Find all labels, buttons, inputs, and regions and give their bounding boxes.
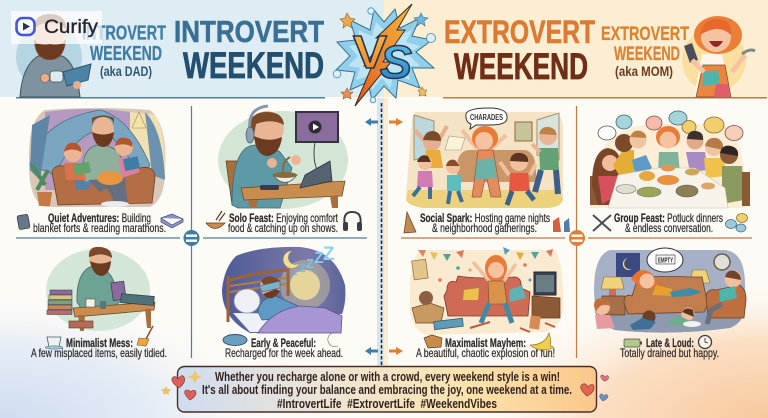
caption: group feast [593,211,748,235]
caption: quiet adventures: blanket forts & reading marathons. [33,221,166,235]
heading: introvert weekend: INTROVERT [174,14,324,49]
icon: banner hearts right [572,370,609,401]
header: introvert small title [82,22,166,79]
icon: equals orange [569,230,585,246]
caption: quiet adventures: Quiet Adventures: Building [48,211,151,225]
heading: extrovert weekend: WEEKEND [454,46,588,87]
callout: closing message banner: It's all about finding your balance and embracing the joy, one weekend at a time. [202,382,572,397]
header: extrovert small title: (aka MOM) [615,63,673,79]
caption: solo feast: Solo Feast: Enjoying comfort [229,211,338,225]
header: extrovert mom character [682,16,755,97]
caption: maximalist mayhem: A beautiful, chaotic explosion of fun! [416,346,555,360]
illustration: solo feast [218,106,348,209]
header: extrovert small title: WEEKEND [614,44,680,65]
illustration: late and loud [594,248,746,333]
VS burst badge: V [353,26,387,78]
arrow: bottom left [365,347,378,355]
caption: minimalist mess [31,326,167,360]
illustration: early and peaceful sleep: Z [299,263,306,275]
illustration: early and peaceful sleep: Z [314,250,324,267]
arrow: top right [389,118,403,126]
divider: center dashed line [380,103,382,366]
caption: maximalist mayhem: Maximalist Mayhem: [445,336,526,350]
header: introvert small title: INTROVERT [82,22,166,44]
caption: social spark: & neighborhood gatherings. [432,221,537,235]
header: extrovert small title [601,24,689,79]
icon: banner hearts left [161,370,202,400]
illustration: social spark party: CHARADES [470,113,503,122]
caption: social spark [404,211,570,235]
heading: introvert weekend: WEEKEND [183,45,324,86]
VS burst badge: S [380,36,412,88]
heading: introvert weekend [174,14,324,86]
VS burst badge [333,4,436,106]
callout: closing message banner: #IntrovertLife #ExtrovertLife #WeekendVibes [277,396,497,411]
arrow: bottom right [389,347,403,355]
watermark: curify logo: Curify [44,17,99,38]
caption: early and peaceful: Recharged for the week ahead. [225,346,343,360]
caption: solo feast: food & catching up on shows. [228,221,338,235]
illustration: group feast [590,111,750,208]
caption: quiet adventures [17,211,183,235]
header: introvert dad character [16,14,91,97]
divider: extrovert grid [401,106,752,358]
header: extrovert small title: EXTROVERT [601,24,689,45]
illustration: early and peaceful sleep: Z [323,244,335,265]
caption: late and loud: Totally drained but happy. [620,346,719,360]
illustration: early and peaceful sleep [222,244,345,333]
illustration: late and loud: EMPTY [658,258,673,264]
heading: extrovert weekend [444,14,595,87]
caption: late and loud [620,336,719,360]
illustration: early and peaceful sleep: Z [306,256,314,271]
caption: group feast: Group Feast: Potluck dinners [614,211,723,225]
arrow: top left [365,118,378,126]
caption: maximalist mayhem [416,333,555,360]
illustration: minimalist mess [46,247,155,331]
icon: equals blue [184,230,200,246]
illustration: social spark party [406,108,563,208]
heading: extrovert weekend: EXTROVERT [444,14,595,50]
illustration: quiet adventures blanket fort [29,108,165,207]
callout: closing message banner [178,366,596,412]
callout: closing message banner: Whether you recharge alone or with a crowd, every weekend style is a win! [215,369,560,384]
caption: group feast: & endless conversation. [625,221,713,235]
header: introvert small title: WEEKEND [90,43,162,65]
caption: early and peaceful: Early & Peaceful: [251,336,316,350]
caption: minimalist mess: A few misplaced items, easily tidied. [31,346,167,360]
watermark: curify logo [11,11,102,44]
divider: introvert grid [16,106,367,358]
caption: late and loud: Late & Loud: [646,336,694,350]
illustration: maximalist mayhem [410,247,563,335]
caption: social spark: Social Spark: Hosting game nights [420,211,550,225]
caption: minimalist mess: Minimalist Mess: [66,336,133,350]
caption: solo feast [206,211,362,235]
caption: early and peaceful [223,333,343,360]
header: introvert small title: (aka DAD) [100,63,152,79]
illustration: early and peaceful sleep: z [293,267,298,277]
